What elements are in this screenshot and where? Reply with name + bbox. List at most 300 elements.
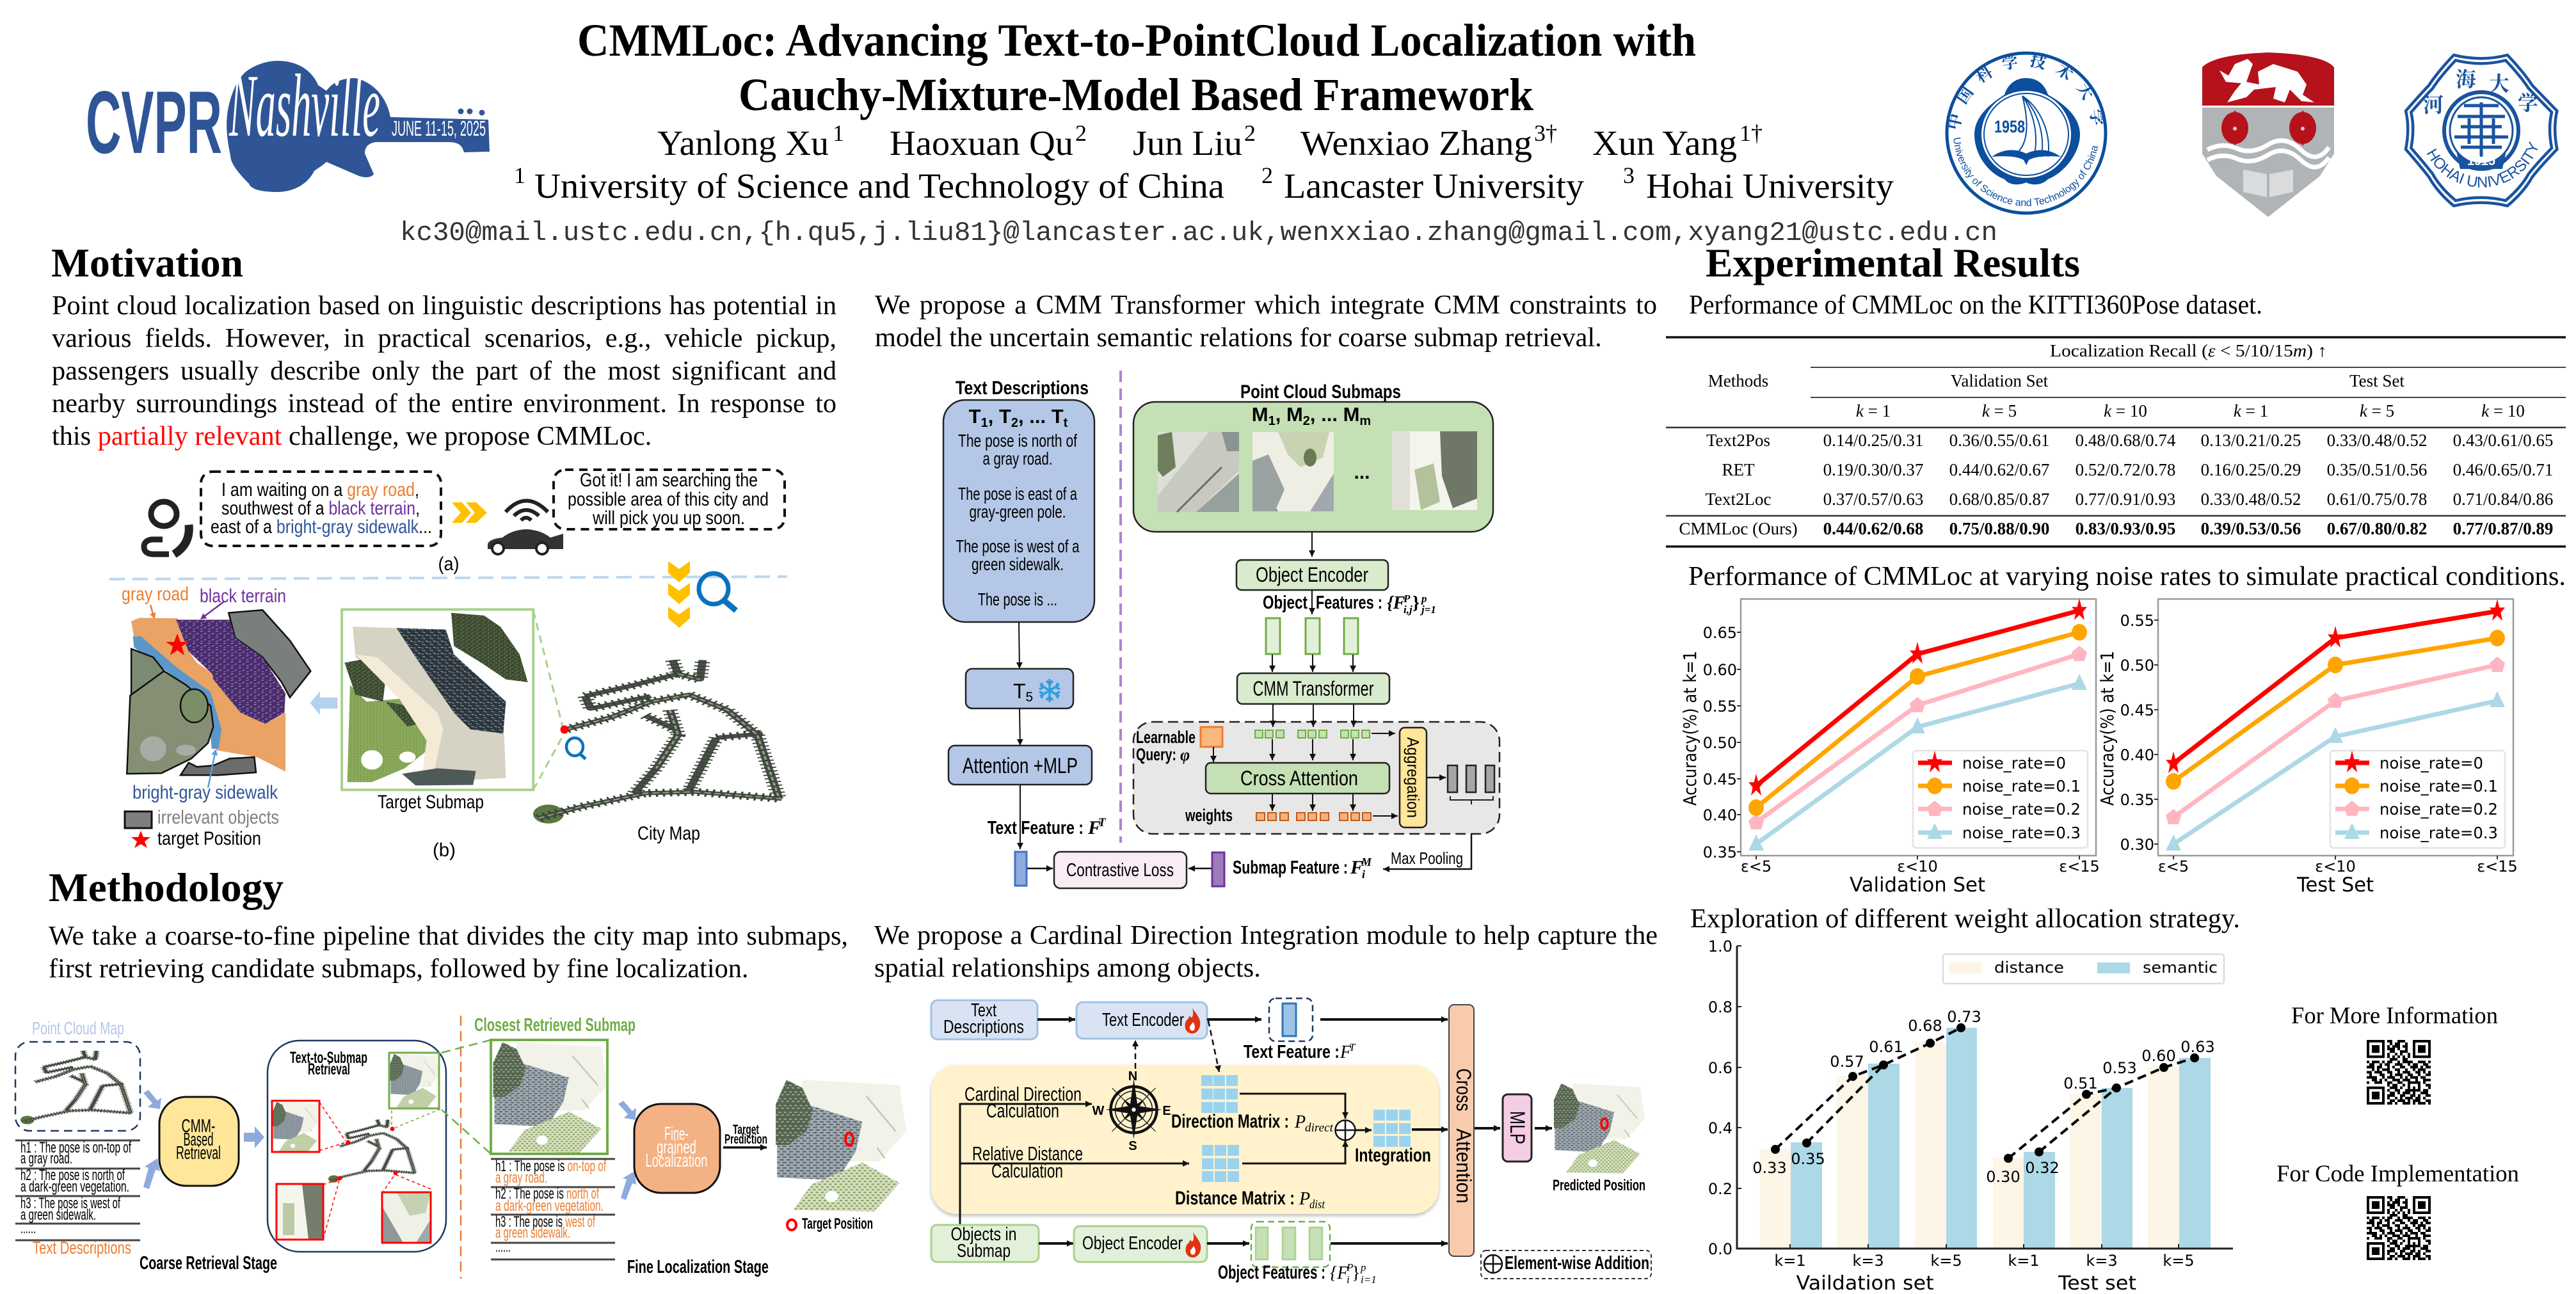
label: object features: p (1360, 1261, 1366, 1274)
chart: test set noise: Accuracy(%) at k=1 (2097, 651, 2118, 806)
table row: Text2Pos: 0.48/0.68/0.74 (2076, 431, 2176, 450)
series: noise_rate=0.3 (2166, 691, 2505, 851)
table row: Text2Loc: 0.61/0.75/0.78 (2327, 490, 2427, 509)
data labels: 0.35 (1791, 1150, 1825, 1168)
label: (a): (a) (438, 554, 460, 575)
affiliations: 3 (1623, 163, 1635, 188)
chart: validation set noise: Accuracy(%) at k=1 (1679, 651, 1700, 806)
affiliations (514, 163, 1894, 205)
text: motivation paragraph: various fields. However, in practical scenarios, e.g., vehicle pickup, (52, 323, 836, 353)
label: learnable query: Learnable (1136, 728, 1196, 747)
logo: Hohai: 大 (2489, 72, 2509, 95)
series: noise_rate=0.1 (2166, 630, 2505, 790)
label: fine localization stage: Fine Localization Stage (627, 1257, 769, 1277)
legend: validation: noise_rate=0 (1962, 754, 2066, 772)
authors: 1† (1740, 120, 1763, 146)
table: localization recall: Validation Set (1951, 371, 2049, 390)
box: fine-grained localization: grained (657, 1137, 696, 1158)
icon: flame (1185, 1008, 1200, 1034)
legend: target position: Target Position (802, 1215, 873, 1233)
right branch: point cloud submaps (1133, 381, 1500, 834)
box: aggregation (1400, 728, 1427, 827)
figure: CMM Transformer architecture (943, 371, 1500, 888)
logo: CVPR Nashville: JUNE 11-15, 2025 (392, 116, 486, 140)
image: submap 1 (1158, 432, 1239, 512)
icon: roses (2221, 110, 2316, 146)
table: text descriptions: h1 : The pose is on-top of (20, 1139, 131, 1156)
box: cross attention (1206, 763, 1389, 794)
figure: cardinal direction integration (931, 998, 1651, 1286)
arrow: yellow chevrons down (668, 561, 690, 628)
table header: k values: k = 5 (2360, 401, 2394, 420)
image: red-framed candidate 3 (382, 1192, 431, 1243)
label: object features: P (1346, 1261, 1353, 1274)
label: submap feature: Submap Feature : (1233, 858, 1348, 878)
table: localization recall: Test Set (2349, 371, 2404, 390)
box: objects in submap: Submap (957, 1241, 1011, 1261)
callout: passenger speech bubble: east of a bright-gray sidewalk... (211, 516, 432, 538)
text: methodology paragraph: first retrieving candidate submaps, followed by fine localization. (49, 954, 749, 984)
logo: Hohai: 1915 (2467, 152, 2495, 168)
data labels: 0.57 (1830, 1053, 1864, 1071)
legend: validation (1913, 751, 2088, 848)
table: highlighted descriptions (491, 1158, 615, 1259)
legend: test: noise_rate=0.2 (2380, 800, 2498, 819)
affiliations: Lancaster University (1284, 166, 1585, 205)
label: distance matrix: dist (1309, 1198, 1325, 1211)
table row: CMMLoc: 0.67/0.80/0.82 (2327, 519, 2427, 538)
box: attention + MLP (948, 746, 1092, 785)
box: contrastive loss: Contrastive Loss (1066, 860, 1174, 881)
chart: test set noise (2097, 599, 2518, 897)
chart: test set noise: ε<15 (2477, 858, 2518, 875)
arrow: light blue left (310, 691, 337, 715)
legend: weights: distance (1994, 959, 2064, 977)
image: predicted position (1553, 1083, 1645, 1194)
box: cross attention (1449, 1005, 1475, 1256)
panel: direction integration module (931, 1021, 1448, 1225)
table: localization recall: Methods (1708, 371, 1768, 390)
icon: snowflake (1039, 679, 1060, 702)
logo: USTC (1946, 51, 2107, 215)
right branch: point cloud submaps: , ... M (1310, 403, 1359, 426)
icon: compass: N (1128, 1069, 1137, 1083)
arrows: into retrieval (143, 1090, 161, 1189)
text: CMM transformer paragraph (875, 290, 1657, 353)
table row: Text2Pos: 0.13/0.21/0.25 (2201, 431, 2301, 450)
panel: text-to-submap retrieval: Text-to-Submap (290, 1049, 367, 1067)
table row: Text2Pos: 0.43/0.61/0.65 (2453, 431, 2553, 450)
label: text feature: T (1349, 1041, 1356, 1053)
trend lines (1775, 1028, 2195, 1158)
left branch: text descriptions (943, 378, 1107, 849)
bars: distance (1760, 1042, 2179, 1249)
label: gray road: gray road (122, 584, 189, 605)
left branch: text descriptions: green sidewalk. (972, 554, 1064, 574)
chart: test set noise: 0.55 (2120, 612, 2154, 630)
chart: weight allocation bars: k=1 (1774, 1252, 1806, 1270)
map: city map: City Map (637, 823, 700, 844)
text: motivation paragraph: this partially relevant challenge, we propose CMMLoc. (52, 421, 652, 451)
table header: k values: k = 1 (1856, 401, 1891, 420)
table: text descriptions (15, 1139, 140, 1258)
callout: passenger speech bubble: I am waiting on a gray road, (221, 479, 419, 500)
table: text descriptions: a green sidewalk. (20, 1206, 96, 1224)
authors: Wenxiao Zhang (1300, 124, 1532, 163)
chart: weight allocation bars: 0.2 (1708, 1180, 1732, 1198)
label: relative distance calculation (972, 1142, 1083, 1182)
icon: addition operator (1335, 1120, 1356, 1140)
right branch: point cloud submaps: Point Cloud Submaps (1240, 381, 1401, 403)
table row: CMMLoc: CMMLoc (Ours) (1679, 519, 1798, 538)
box: cross attention: Cross Attention (1240, 767, 1358, 790)
data labels: 0.63 (2180, 1038, 2215, 1056)
data labels: 0.60 (2141, 1047, 2176, 1065)
label: coarse retrieval stage: Coarse Retrieval Stage (140, 1253, 277, 1274)
label: text feature: F (1340, 1042, 1352, 1062)
table: localization recall: Localization Recall ( ε < 5/10/15 m) ↑ (2050, 341, 2327, 360)
label: text feature: F (1087, 817, 1101, 838)
QR code: more information (2367, 1040, 2431, 1105)
box: T5 encoder: T (1013, 680, 1026, 703)
label: object features: Object (1263, 593, 1308, 613)
left branch: text descriptions: 2 (1011, 416, 1018, 430)
right branch: point cloud submaps: 2 (1303, 414, 1310, 428)
chart: validation set noise: ε<10 (1897, 858, 1938, 875)
legend: validation: noise_rate=0.3 (1962, 824, 2081, 842)
table row: RET (1722, 460, 2553, 479)
figure: coarse-to-fine pipeline (15, 1015, 906, 1279)
table row: RET: 0.44/0.62/0.67 (1949, 460, 2049, 479)
box: attention + MLP: Attention +MLP (963, 754, 1078, 778)
label: object features: i=1 (1361, 1274, 1377, 1286)
image: red-framed candidate 2 (276, 1184, 323, 1240)
logo: CVPR Nashville: Nashville (228, 56, 380, 156)
box: object encoder: Object Encoder (1082, 1233, 1183, 1254)
box: fine-grained localization: Fine- (664, 1124, 689, 1144)
box: text descriptions: Descriptions (943, 1017, 1024, 1037)
chart: validation set noise: 0.60 (1703, 661, 1737, 679)
text: cardinal direction paragraph (874, 920, 1658, 983)
label: distance matrix: Distance Matrix : (1175, 1188, 1295, 1209)
table row: Text2Loc: 0.68/0.85/0.87 (1949, 490, 2049, 509)
tokens: green squares (1255, 730, 1370, 738)
legend: element-wise addition (1481, 1250, 1651, 1279)
panel: point cloud map (15, 1018, 140, 1131)
icon: compass: E (1162, 1104, 1171, 1118)
series: noise_rate=0.2 (2166, 657, 2505, 824)
table row: RET: 0.46/0.65/0.71 (2453, 460, 2553, 479)
label: object features: Object Features : (1218, 1262, 1325, 1283)
text: cardinal direction paragraph: spatial relationships among objects. (874, 953, 1261, 983)
image: closest retrieved submap (491, 1040, 607, 1154)
legend: weights: semantic (2143, 959, 2218, 977)
chart: validation set noise: 0.65 (1703, 624, 1737, 642)
bar: text feature (1015, 852, 1027, 886)
chart: weight allocation bars: Test set (2058, 1272, 2136, 1294)
icon: connected car (488, 500, 563, 554)
box: text encoder: Text Encoder (1102, 1010, 1184, 1030)
image: target position result (776, 1080, 906, 1211)
authors: Yanlong Xu (657, 124, 829, 163)
table row: Text2Loc: 0.37/0.57/0.63 (1823, 490, 1923, 509)
authors: Jun Liu (1133, 124, 1242, 163)
box: object encoder (1236, 560, 1388, 590)
chart: validation set noise: 0.35 (1703, 843, 1737, 861)
right branch: point cloud submaps: , M (1276, 403, 1303, 426)
trend markers (1771, 1023, 2199, 1163)
table header: k values: k = 10 (2104, 401, 2147, 420)
callout: vehicle speech bubble: Got it! I am searching the (580, 470, 758, 491)
table row: RET: 0.16/0.25/0.29 (2201, 460, 2301, 479)
table header: k values (1856, 401, 2525, 420)
label: direction matrix: direct (1305, 1121, 1334, 1135)
data labels: 0.30 (1986, 1168, 2020, 1186)
label: text feature: Text Feature : (1244, 1042, 1340, 1062)
caption: noise rates: Performance of CMMLoc at varying noise rates to simulate practical conditions. (1688, 561, 2566, 591)
legend: test: noise_rate=0.1 (2380, 777, 2498, 795)
table header: k values: k = 1 (2234, 401, 2268, 420)
logo: Hohai (2404, 54, 2559, 207)
authors: Haoxuan Qu (890, 124, 1073, 163)
legend: irrelevant objects (125, 807, 279, 828)
table row: Text2Loc: 0.71/0.84/0.86 (2453, 490, 2553, 509)
authors: 2 (1075, 120, 1087, 146)
left branch: text descriptions: The pose is east of a (958, 484, 1077, 504)
affiliations: University of Science and Technology of China (534, 166, 1224, 205)
box: cross attention: Cross (1452, 1069, 1475, 1111)
icon: person on phone (144, 502, 189, 554)
authors: 2 (1244, 120, 1256, 146)
chart: test set noise: 0.50 (2120, 657, 2154, 675)
logo: Lancaster (2202, 52, 2334, 217)
legend: element-wise addition: Element-wise Addition (1505, 1253, 1649, 1274)
left branch: text descriptions: The pose is north of (958, 431, 1077, 451)
chart: validation set noise (1679, 598, 2100, 897)
text feature bar (1269, 998, 1313, 1041)
label: learnable query (1136, 728, 1196, 764)
title (577, 15, 1696, 120)
table row: Text2Pos: Text2Pos (1706, 431, 1770, 450)
chart: validation set noise: Validation Set (1850, 874, 1985, 897)
table: highlighted descriptions: a green sidewalk. (495, 1224, 570, 1242)
table row: Text2Pos: 0.36/0.55/0.61 (1949, 431, 2049, 450)
table row: Text2Pos (1706, 431, 2553, 450)
image: predicted position: Predicted Position (1553, 1177, 1645, 1194)
box: text descriptions: Text (971, 1000, 996, 1021)
table: highlighted descriptions: h3 : The pose is west of (495, 1213, 595, 1231)
data labels: 0.33 (1752, 1159, 1787, 1177)
chart: weight allocation bars: Vaildation set (1796, 1272, 1934, 1294)
box: fine-grained localization: Localization (645, 1151, 708, 1171)
label: object features: {F (1387, 593, 1405, 613)
matrix: direction (1201, 1075, 1238, 1113)
text: methodology paragraph (49, 921, 848, 984)
box: object encoder (1074, 1226, 1207, 1262)
logo: CVPR Nashville (86, 56, 490, 192)
arrow: target prediction: Target (733, 1122, 759, 1137)
data labels: 0.51 (2063, 1074, 2098, 1092)
table: text descriptions: h3 : The pose is west of (20, 1195, 120, 1212)
authors (657, 120, 1763, 163)
chart: test set noise: 0.30 (2120, 836, 2154, 854)
figure: motivation scenario (109, 470, 787, 861)
title: Cauchy-Mixture-Model Based Framework (739, 69, 1533, 120)
table: highlighted descriptions: a dark-green vegetation. (495, 1197, 604, 1215)
legend: test: noise_rate=0 (2380, 754, 2483, 772)
left branch: text descriptions: 1 (981, 416, 988, 430)
table row: CMMLoc: 0.75/0.88/0.90 (1949, 519, 2049, 538)
series: noise_rate=0.2 (1748, 646, 2087, 829)
label: object features: j=1 (1420, 603, 1436, 616)
box: object encoder: Object Encoder (1256, 563, 1368, 586)
chart: validation set noise: ε<5 (1741, 858, 1772, 875)
legend: validation: noise_rate=0.2 (1962, 800, 2081, 819)
right branch: point cloud submaps: m (1359, 414, 1371, 428)
chart: test set noise: 0.35 (2120, 791, 2154, 809)
data labels: 0.61 (1869, 1038, 1903, 1056)
text: motivation paragraph (52, 291, 836, 451)
label: direction matrix: Direction Matrix : (1171, 1111, 1289, 1132)
table: highlighted descriptions: h1 : The pose is on-top of (495, 1158, 606, 1175)
chart: validation set noise: 0.55 (1703, 698, 1737, 715)
series: noise_rate=0 (2166, 599, 2505, 773)
table: text descriptions: a dark-green vegetation. (20, 1178, 129, 1195)
icon: compass: W (1092, 1104, 1105, 1118)
table: text descriptions: a gray road. (20, 1150, 72, 1167)
box: CMM-based retrieval (159, 1097, 239, 1186)
left branch: text descriptions: Text Descriptions (956, 378, 1089, 399)
table row: Text2Loc: 0.77/0.91/0.93 (2076, 490, 2175, 509)
label: direction matrix: P (1294, 1112, 1306, 1132)
table: highlighted descriptions: ...... (495, 1238, 511, 1256)
box: fine-grained localization (634, 1104, 720, 1193)
image: submap 2 (1252, 432, 1334, 511)
series: noise_rate=0 (1748, 598, 2087, 795)
box: cross attention: Attention (1452, 1129, 1475, 1203)
callout: vehicle speech bubble: possible area of this city and (568, 489, 769, 510)
label: bright-gray sidewalk: bright-gray sidewalk (132, 782, 278, 803)
feature bars: green (1266, 618, 1358, 654)
chart: test set noise: ε<5 (2158, 858, 2189, 875)
chart: validation set noise: 0.50 (1703, 734, 1737, 752)
label: distance matrix: P (1299, 1189, 1310, 1209)
table row: CMMLoc: 0.77/0.87/0.89 (2453, 519, 2553, 538)
label: submap feature: i (1362, 868, 1365, 881)
matrix: integration (1373, 1110, 1411, 1147)
left branch: text descriptions: , ... T (1018, 405, 1064, 427)
table: text descriptions: h2 : The pose is north of (20, 1167, 125, 1184)
box: MLP: MLP (1506, 1111, 1529, 1144)
chart: validation set noise: 0.45 (1703, 771, 1737, 788)
legend: validation: noise_rate=0.1 (1962, 777, 2081, 795)
legend: target position: target Position (157, 828, 261, 849)
series: noise_rate=0.1 (1748, 624, 2087, 816)
label: learnable query: φ (1180, 746, 1190, 764)
table row: Text2Pos: 0.33/0.48/0.52 (2327, 431, 2427, 450)
label: text feature: T (1098, 816, 1107, 829)
panel: point cloud map: Point Cloud Map (32, 1018, 124, 1038)
panel: text-to-submap retrieval: Retrieval (308, 1060, 350, 1078)
box: T5 encoder (966, 669, 1073, 708)
heading: Motivation: Motivation (51, 240, 243, 285)
data labels: 0.73 (1947, 1008, 1981, 1026)
left branch: text descriptions: a gray road. (983, 449, 1052, 468)
table row: RET: RET (1722, 460, 1755, 479)
box: text encoder (1076, 1002, 1207, 1039)
left branch: text descriptions: The pose is ... (978, 589, 1057, 609)
legend: weights (1943, 954, 2224, 984)
chart: test set noise: Test Set (2296, 874, 2374, 897)
icon: guitar body (227, 61, 490, 192)
data labels: 0.32 (2025, 1159, 2060, 1177)
label: submap feature: M (1361, 856, 1372, 868)
chart: weight allocation bars: 0.8 (1708, 998, 1732, 1016)
box: text descriptions (931, 1000, 1037, 1039)
table row: Text2Loc: 0.33/0.48/0.52 (2201, 490, 2301, 509)
left branch: text descriptions: gray-green pole. (969, 502, 1066, 522)
authors: 1 (833, 120, 844, 146)
logo: CVPR Nashville: CVPR (86, 73, 222, 172)
caption: weight allocation: Exploration of different weight allocation strategy. (1690, 904, 2240, 934)
logo: Hohai: 河 (2423, 93, 2444, 116)
label: cardinal direction calculation (964, 1083, 1082, 1122)
image: target submap (342, 609, 563, 813)
callout: passenger speech bubble (201, 472, 441, 546)
table row: Text2Loc (1705, 490, 2553, 509)
chart: test set noise: 0.40 (2120, 746, 2154, 764)
chart: weight allocation bars: k=3 (1852, 1252, 1884, 1270)
text: motivation paragraph: Point cloud localization based on linguistic descriptions has potential in (52, 291, 836, 321)
label: cardinal direction calculation: Cardinal Direction (964, 1083, 1082, 1105)
logo: Hohai: HOHAI UNIVERSITY (2427, 141, 2538, 188)
callout: passenger speech bubble: southwest of a black terrain, (221, 498, 420, 519)
label: object features: {F (1330, 1263, 1348, 1283)
data labels: 0.68 (1908, 1017, 1942, 1035)
tokens: orange squares (1256, 813, 1371, 820)
label: learnable query: Query: (1136, 745, 1176, 764)
left branch: text descriptions: t (1064, 416, 1068, 430)
logo: Hohai: 学 (2518, 92, 2538, 115)
label: object features: P (1403, 593, 1411, 605)
label: black terrain (200, 586, 286, 619)
label: object features: Features : (1316, 593, 1382, 613)
table header: k values: k = 5 (1982, 401, 2017, 420)
table row: RET: 0.52/0.72/0.78 (2076, 460, 2175, 479)
arrow: target prediction (723, 1122, 767, 1147)
logo: Hohai: 海 (2456, 68, 2476, 91)
right branch: point cloud submaps: 1 (1268, 414, 1276, 428)
left branch: text descriptions: , T (988, 405, 1011, 427)
label: bright-gray sidewalk (132, 750, 278, 803)
arrow: max pooling: Max Pooling (1391, 849, 1463, 868)
label: object features: } (1412, 593, 1420, 613)
map: annotated target map (122, 584, 310, 849)
box: CMM-based retrieval: CMM- (182, 1116, 215, 1137)
table: highlighted descriptions: a gray road. (495, 1169, 547, 1186)
table: highlighted descriptions: h2 : The pose is north of (495, 1185, 599, 1202)
chart: validation set noise: 0.40 (1703, 806, 1737, 824)
matrix: distance (1202, 1145, 1239, 1182)
legend: target position (131, 828, 261, 849)
box: CMM-based retrieval: Retrieval (176, 1143, 221, 1163)
label: gray road (122, 584, 189, 618)
icon: compass (1092, 1069, 1171, 1153)
legend: test: noise_rate=0.3 (2380, 824, 2498, 842)
table: localization recall (1666, 337, 2566, 547)
arrow: to text-to-submap (244, 1126, 264, 1148)
map: city map (533, 660, 782, 844)
